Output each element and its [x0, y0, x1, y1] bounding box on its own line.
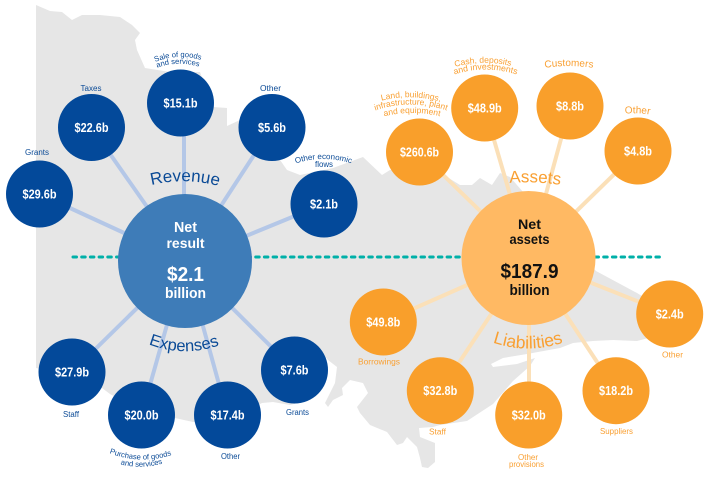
- liabilities: other provisions: Other: [518, 453, 538, 462]
- heading: Expenses: Expenses: [150, 334, 218, 354]
- revenue: other economic flows: $2.1b: [310, 198, 338, 212]
- central circle: net result: result: [166, 235, 205, 251]
- revenue: sale of goods and services: $15.1b: [164, 96, 198, 110]
- revenue: taxes: $22.6b: [74, 121, 109, 135]
- liabilities: suppliers: [582, 357, 650, 436]
- assets: cash, deposits and investments: [451, 56, 518, 142]
- liabilities: suppliers: Suppliers: [600, 427, 633, 436]
- assets: land, buildings, infrastructure, plant and equipment: Land, buildings,: [380, 91, 440, 102]
- liabilities: other: Other: [662, 350, 683, 360]
- expenses: grants: Grants: [286, 408, 309, 417]
- revenue: sale of goods and services: and services: [156, 58, 200, 68]
- heading: Assets: Assets: [510, 170, 560, 184]
- revenue: sale of goods and services: Sale of goods: [154, 52, 202, 62]
- central circle: net assets: $187.9: [500, 261, 558, 283]
- assets: other: [604, 106, 672, 184]
- revenue: taxes: [58, 84, 125, 161]
- liabilities: borrowings: $49.8b: [366, 316, 401, 330]
- assets: cash, deposits and investments: $48.9b: [468, 102, 502, 116]
- expenses: purchase of goods and services: $20.0b: [124, 408, 159, 422]
- liabilities: staff: [407, 357, 474, 437]
- equator dashed divider: [73, 256, 662, 258]
- expenses: staff: Staff: [63, 410, 80, 419]
- revenue: grants: $29.6b: [22, 188, 57, 202]
- revenue: grants: [6, 148, 73, 228]
- revenue: grants: Grants: [25, 148, 49, 157]
- expenses: grants: [261, 336, 328, 417]
- central circle: net result: Net: [174, 219, 197, 236]
- expenses: other: $17.4b: [210, 408, 245, 422]
- revenue: other economic flows: [290, 154, 358, 238]
- expenses: purchase of goods and services: [108, 382, 175, 467]
- assets: other: $4.8b: [624, 144, 652, 158]
- central circle: net result: $2.1: [167, 264, 204, 286]
- expenses: other: [194, 382, 261, 461]
- revenue: other economic flows: Other economic: [295, 154, 352, 163]
- liabilities: other provisions: provisions: [509, 460, 544, 469]
- liabilities: staff: $32.8b: [423, 384, 458, 398]
- central circle: net assets: Net: [518, 216, 541, 232]
- revenue: sale of goods and services: [147, 52, 214, 136]
- liabilities: other: [636, 280, 703, 360]
- central circle: net assets: assets: [510, 231, 550, 247]
- central circle: net assets: billion: [510, 283, 550, 299]
- assets: land, buildings, infrastructure, plant and equipment: infrastructure, plant: [374, 99, 448, 110]
- heading: Liabilities: Liabilities: [494, 332, 562, 348]
- liabilities: suppliers: $18.2b: [599, 384, 633, 398]
- liabilities: staff: Staff: [429, 428, 447, 437]
- assets: other: Other: [625, 106, 651, 114]
- expenses: purchase of goods and services: Purchase of goods: [110, 448, 172, 461]
- expenses: staff: $27.9b: [55, 366, 89, 380]
- liabilities: borrowings: [350, 288, 417, 366]
- assets: customers: Customers: [544, 60, 594, 68]
- connectors: revenue and expenses: [40, 103, 324, 415]
- assets: cash, deposits and investments: and investments: [454, 64, 518, 74]
- revenue: other: [238, 84, 306, 161]
- expenses: purchase of goods and services: and services: [120, 460, 162, 467]
- expenses: staff: [38, 338, 106, 419]
- revenue: taxes: Taxes: [80, 84, 102, 93]
- liabilities: borrowings: Borrowings: [358, 358, 400, 366]
- liabilities: other: $2.4b: [656, 308, 684, 322]
- central circle: net assets: [462, 191, 596, 325]
- revenue: other: Other: [260, 84, 281, 93]
- assets: customers: [536, 60, 604, 140]
- central circle: net result: billion: [165, 285, 206, 302]
- liabilities: other provisions: [495, 382, 562, 469]
- central circle: net result: [118, 194, 252, 328]
- heading: Revenue: Revenue: [150, 172, 220, 186]
- liabilities: other provisions: $32.0b: [512, 408, 546, 422]
- expenses: other: Other: [221, 452, 240, 461]
- revenue: other: $5.6b: [258, 121, 286, 135]
- revenue: other economic flows: flows: [315, 160, 333, 169]
- connectors: assets and liabilities: [383, 106, 670, 415]
- assets: cash, deposits and investments: Cash, deposits: [454, 56, 512, 66]
- assets: customers: $8.8b: [556, 100, 584, 114]
- expenses: grants: $7.6b: [280, 364, 309, 378]
- assets: land, buildings, infrastructure, plant and equipment: [374, 91, 453, 186]
- assets: land, buildings, infrastructure, plant and equipment: $260.6b: [400, 146, 439, 160]
- assets: land, buildings, infrastructure, plant and equipment: and equipment: [384, 106, 441, 116]
